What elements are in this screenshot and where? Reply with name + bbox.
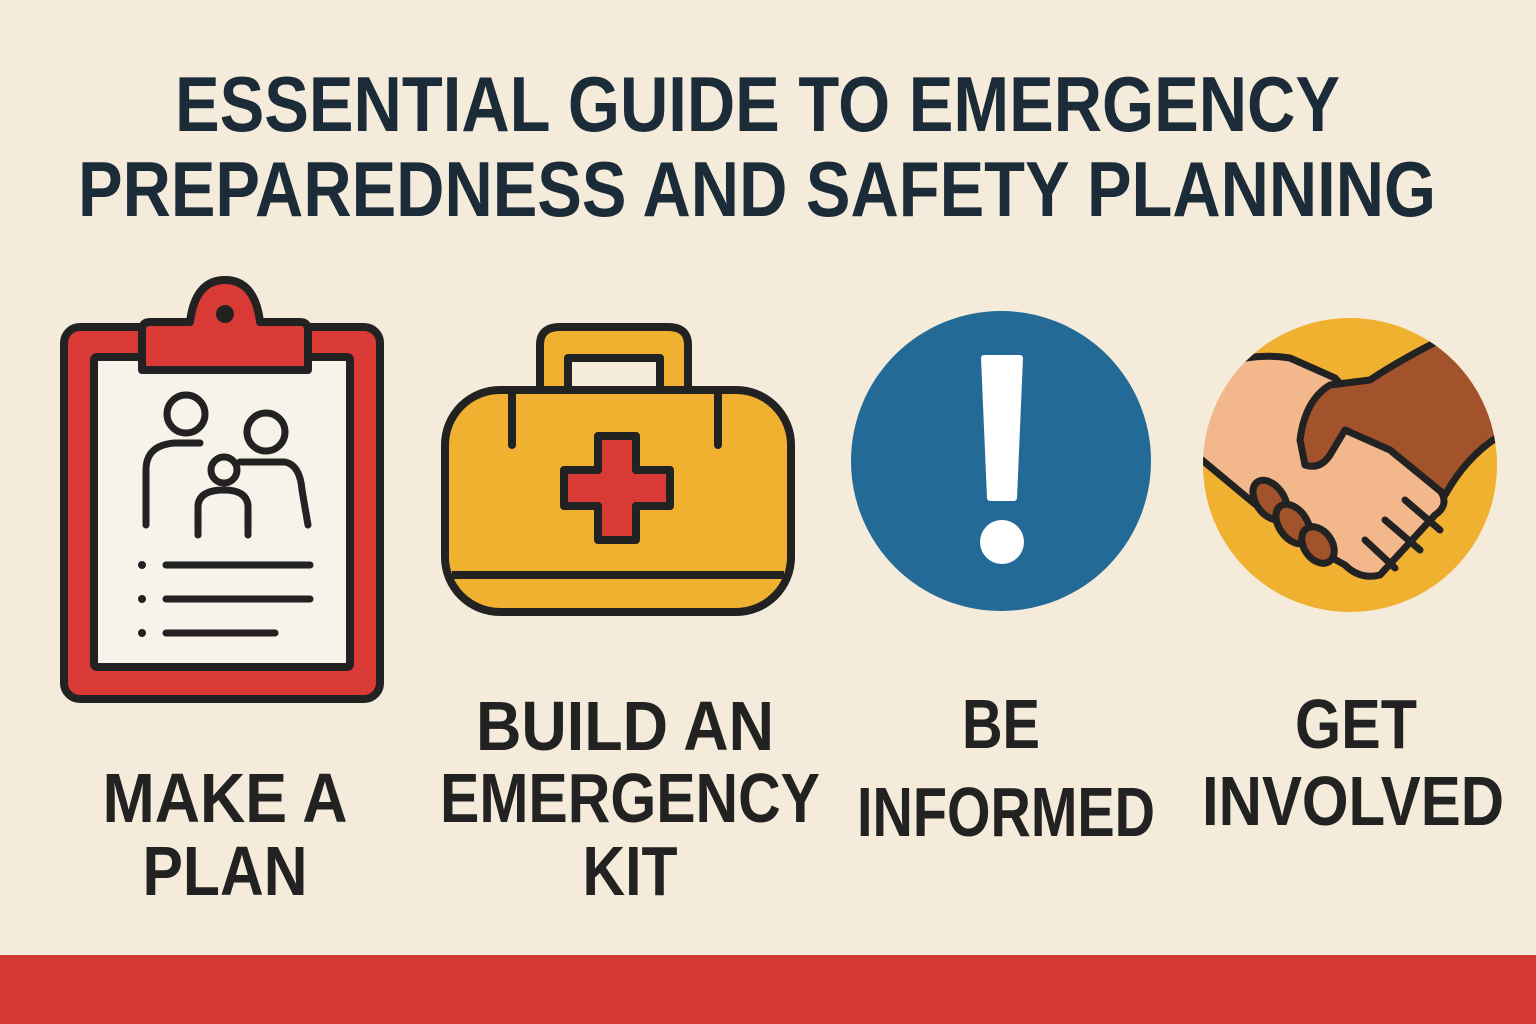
label: get involved: GET	[1295, 685, 1417, 763]
icon: handshake	[1190, 318, 1510, 612]
labels	[102, 685, 1504, 910]
label: be informed: INFORMED	[857, 773, 1155, 851]
title	[78, 60, 1436, 233]
footer bar	[0, 955, 1536, 1024]
label: build an emergency kit: KIT	[582, 832, 678, 910]
title: ESSENTIAL GUIDE TO EMERGENCY	[175, 60, 1340, 148]
label: build an emergency kit	[440, 687, 820, 910]
label: be informed: BE	[962, 685, 1040, 763]
label: build an emergency kit: EMERGENCY	[440, 759, 820, 837]
label: make a plan	[102, 759, 348, 910]
label: build an emergency kit: BUILD AN	[476, 687, 774, 765]
label: get involved	[1202, 685, 1504, 840]
icon: emergency kit	[445, 327, 791, 612]
icon: clipboard plan	[64, 280, 380, 699]
icon: be informed	[851, 311, 1151, 611]
label: make a plan: MAKE A	[102, 759, 348, 837]
label: make a plan: PLAN	[142, 832, 308, 910]
label: be informed	[857, 685, 1155, 851]
